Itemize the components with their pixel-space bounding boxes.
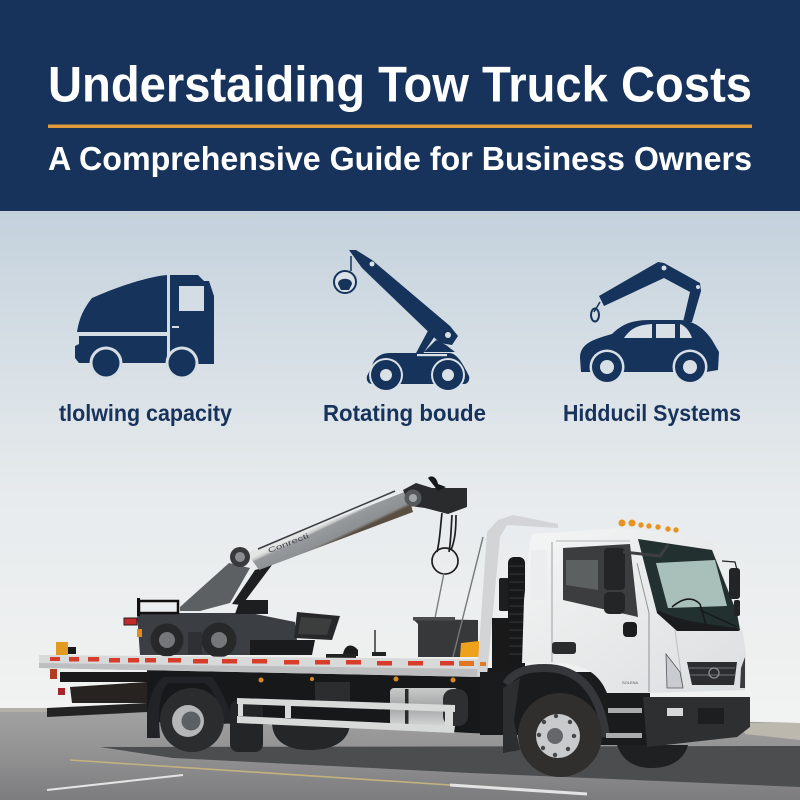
road surface — [0, 708, 800, 800]
icon: hydraulic system car — [580, 262, 719, 384]
subtitle: A Comprehensive Guide for Business Owners — [48, 141, 752, 178]
roof marker lights — [618, 520, 679, 533]
boom head — [403, 483, 467, 514]
label: rotating boom: Rotating boude — [323, 400, 486, 426]
title: Understaiding Tow Truck Costs — [48, 56, 752, 112]
front fender — [503, 668, 606, 753]
label: towing capacity: tlolwing capacity — [59, 400, 232, 426]
icon: rotating boom vehicle — [334, 250, 469, 392]
crane boom: Conrecti — [267, 533, 311, 555]
mast — [180, 563, 250, 611]
crane boom — [230, 476, 467, 570]
tow truck — [39, 476, 750, 777]
side guard rail — [237, 698, 455, 733]
door handle — [552, 642, 576, 654]
bumper — [606, 697, 750, 747]
background sky — [0, 211, 800, 731]
icon: towing capacity truck — [75, 275, 214, 380]
front wheel — [518, 693, 602, 777]
flatbed deck — [39, 642, 480, 677]
unit frame — [137, 613, 297, 655]
side window — [563, 544, 638, 617]
side mirrors — [604, 548, 625, 590]
headlight — [666, 654, 683, 688]
cab: SOLENA — [622, 680, 639, 685]
windshield — [638, 539, 740, 630]
cab — [522, 520, 746, 693]
rear tow unit on deck — [124, 563, 340, 658]
grille — [687, 662, 737, 685]
fuel tank — [390, 688, 468, 726]
unit wheels — [150, 624, 184, 656]
gantry headache rack — [453, 515, 558, 678]
chassis underside — [147, 668, 520, 735]
header banner — [0, 0, 800, 211]
toolbox — [326, 617, 479, 658]
truck chassis front — [480, 672, 650, 745]
hook chains — [432, 513, 458, 574]
label: hydraulic systems: Hidducil Systems — [563, 400, 741, 426]
orange divider — [48, 124, 752, 128]
rear axle wheels — [147, 677, 350, 752]
front axle far wheel — [617, 745, 688, 768]
unit control box — [294, 612, 340, 640]
